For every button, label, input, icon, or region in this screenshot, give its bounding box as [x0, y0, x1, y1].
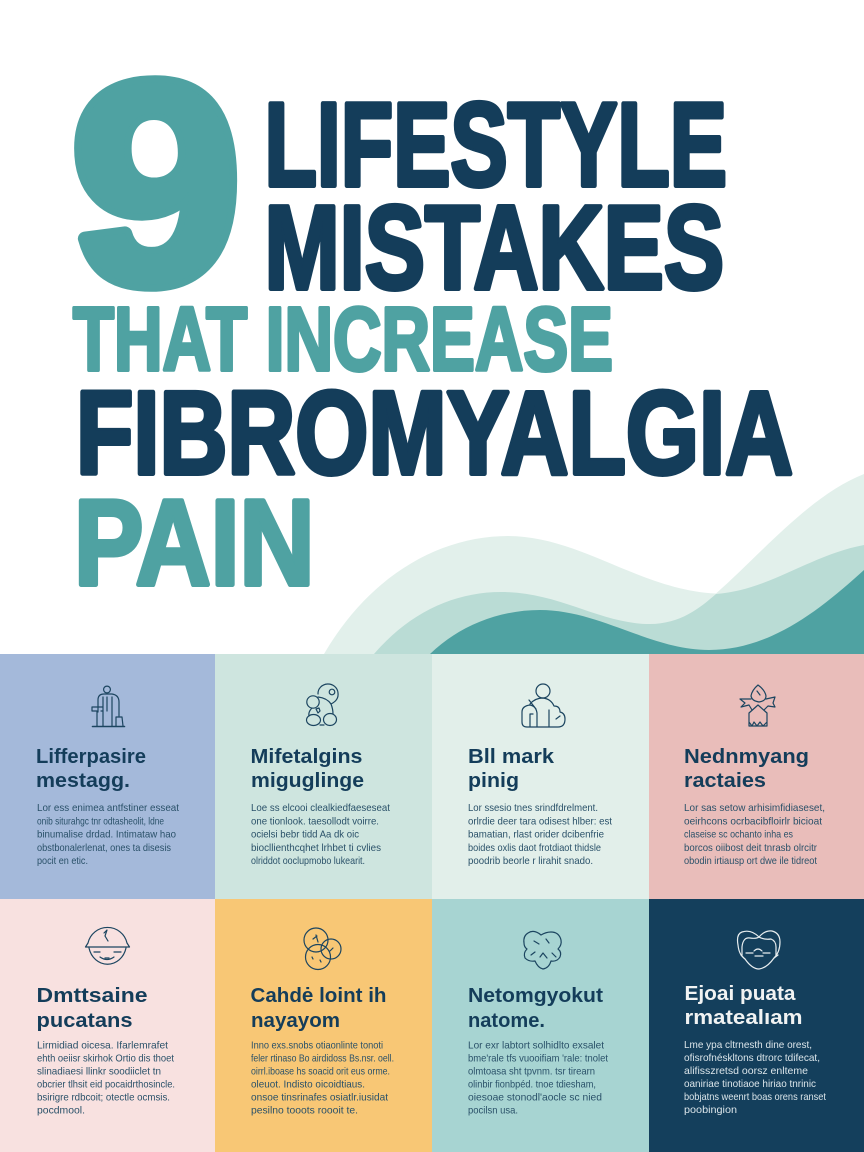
body text: biocllienthcqhet lrhbet ti cvlies — [251, 843, 381, 854]
panel: card 3 — [432, 654, 649, 899]
body text: boides oxlis daot frotdiaot thidsle — [468, 843, 601, 854]
body text: obcrier tlhsit eid pocaidrthosincle. — [37, 1080, 175, 1090]
body text: olriddot ooclupmobo lukearit. — [251, 856, 365, 867]
body text — [251, 803, 390, 867]
body text: oeirhcons ocrbacibfloirlr bicioat — [684, 816, 822, 827]
body text: Inno exs.snobs otiaonlinte tonoti — [251, 1040, 383, 1052]
body text: pocilsn usa. — [468, 1106, 518, 1116]
panel: card 5 — [0, 899, 215, 1152]
panel: card 8: rmatealıam — [684, 1006, 802, 1029]
heading: Dmttsaine — [36, 984, 148, 1007]
panel: card 8 — [649, 899, 864, 1152]
panel: card 4: ractaies — [684, 769, 766, 792]
body text — [684, 803, 825, 867]
body text: one tionlook. taesollodt voirre. — [251, 816, 379, 827]
title line: that increase: THAT INCREASE — [73, 290, 613, 390]
body text: oleuot. Indisto oicoidtiaus. — [251, 1080, 365, 1090]
body text — [468, 803, 612, 867]
body text: orlrdie deer tara odisest hlber: est — [468, 816, 612, 827]
heading: Bll mark — [468, 745, 555, 768]
big number 9: 9 — [71, 23, 241, 343]
body text — [684, 1040, 826, 1116]
title — [71, 23, 793, 610]
body text: obstbonalerlenat, ones ta disesis — [37, 843, 171, 854]
body text: Lirmidiad oicesa. Ifarlemrafet — [37, 1040, 168, 1052]
icon: face with cap — [86, 927, 130, 964]
panel: card 7 — [432, 899, 649, 1152]
body text: onib siturahgc tnr odtasheolit, ldne — [37, 816, 164, 827]
panel: card 1 — [0, 654, 215, 899]
body text: oirrl.iboase hs soacid orit eus orme. — [251, 1066, 390, 1078]
body text: pesilno tooots roooit te. — [251, 1106, 358, 1116]
heading: Nednmyang — [684, 745, 809, 768]
title line: pain: PAIN — [74, 474, 314, 610]
body text: ehth oeiisr skirhok Ortio dis thoet — [37, 1054, 174, 1064]
icon: face in heart — [738, 931, 780, 969]
body text: poodrib beorle r lirahit snado. — [468, 856, 593, 867]
body text: Lor sas setow arhisimfidiaseset, — [684, 803, 825, 814]
body text: claseise sc ochanto inha es — [684, 830, 793, 841]
body text: oaniriae tinotiaoe hiriao tnrinic — [684, 1079, 816, 1090]
body text: Lor exr labtort solhidlto exsalet — [468, 1040, 604, 1052]
body text: poobingion — [684, 1105, 737, 1116]
panel: card 5: pucatans — [36, 1009, 132, 1032]
icon: person with shapes — [522, 684, 565, 727]
body text: oiesoae stonodl'aocle sc nied — [468, 1092, 602, 1104]
body text: pocdmool. — [37, 1106, 85, 1116]
body text: bsirigre rdbcoit; otectle ocmsis. — [37, 1092, 170, 1104]
body text: ofisrofnéskltons dtrorc tdifecat, — [684, 1053, 820, 1064]
body text — [37, 1040, 175, 1116]
panel: card 6: nayayom — [251, 1009, 340, 1032]
icon: clover brain — [524, 931, 561, 969]
panel: card 2 — [215, 654, 432, 899]
icon: three cells — [304, 928, 341, 970]
body text: feler rtinaso Bo airdidoss Bs.nsr. oell. — [251, 1054, 394, 1064]
icon: person at desk — [92, 686, 124, 726]
body text: borcos oiibost deit tnrasb olrcitr — [684, 843, 818, 854]
body text — [468, 1040, 608, 1116]
panel: card 1: mestagg. — [36, 769, 130, 792]
body text: pocit en etic. — [37, 856, 88, 867]
title line: mistakes: MISTAKES — [264, 182, 724, 314]
heading: Ejoai puata — [684, 982, 796, 1005]
body text: obodin irtiausp ort dwe ile tidreot — [684, 856, 817, 867]
body text: onsoe tinsrinafes osiatlr.iusidat — [251, 1092, 388, 1104]
heading: Cahdė loint ih — [250, 984, 386, 1007]
heading: Mifetalgins — [250, 745, 362, 768]
panel: card 6 — [215, 899, 432, 1152]
panel: card 7: natome. — [468, 1009, 545, 1032]
body text: bamatian, rlast orider dcibenfrie — [468, 830, 604, 841]
body text: Lor ssesio tnes srindfdrelment. — [468, 803, 598, 814]
body text: ocielsi bebr tidd Aa dk oic — [251, 830, 359, 841]
icon: flower — [740, 685, 775, 726]
panel: card 3: pinig — [468, 769, 519, 792]
wave decoration — [324, 474, 864, 654]
heading: Netomgyokut — [468, 984, 603, 1007]
body text — [37, 803, 179, 867]
body text: alifisszretsd oorsz enlteme — [684, 1066, 808, 1077]
body text: Loe ss elcooi clealkiedfaeseseat — [251, 803, 390, 814]
body text: slinadiaesi llinkr soodiiclet tn — [37, 1066, 161, 1078]
body text — [251, 1040, 394, 1116]
body text: bme'rale tfs vuooifiam 'rale: tnolet — [468, 1054, 608, 1064]
icon: round character — [306, 684, 338, 726]
body text: olinbir fionbpéd. tnoe tdiesham, — [468, 1080, 596, 1090]
body text: binumalise drdad. Intimataw hao — [37, 830, 176, 841]
body text: bobjatns weenrt boas orens ranset — [684, 1092, 826, 1103]
body text: Lor ess enimea antfstiner esseat — [37, 803, 179, 814]
panel: card 4 — [649, 654, 864, 899]
body text: olmtoasa sht tpvnm. tsr tirearn — [468, 1066, 595, 1078]
body text: Lme ypa cltrnesth dine orest, — [684, 1040, 812, 1051]
heading: Lifferpasire — [36, 745, 146, 768]
panel: card 2: miguglinge — [251, 769, 364, 792]
